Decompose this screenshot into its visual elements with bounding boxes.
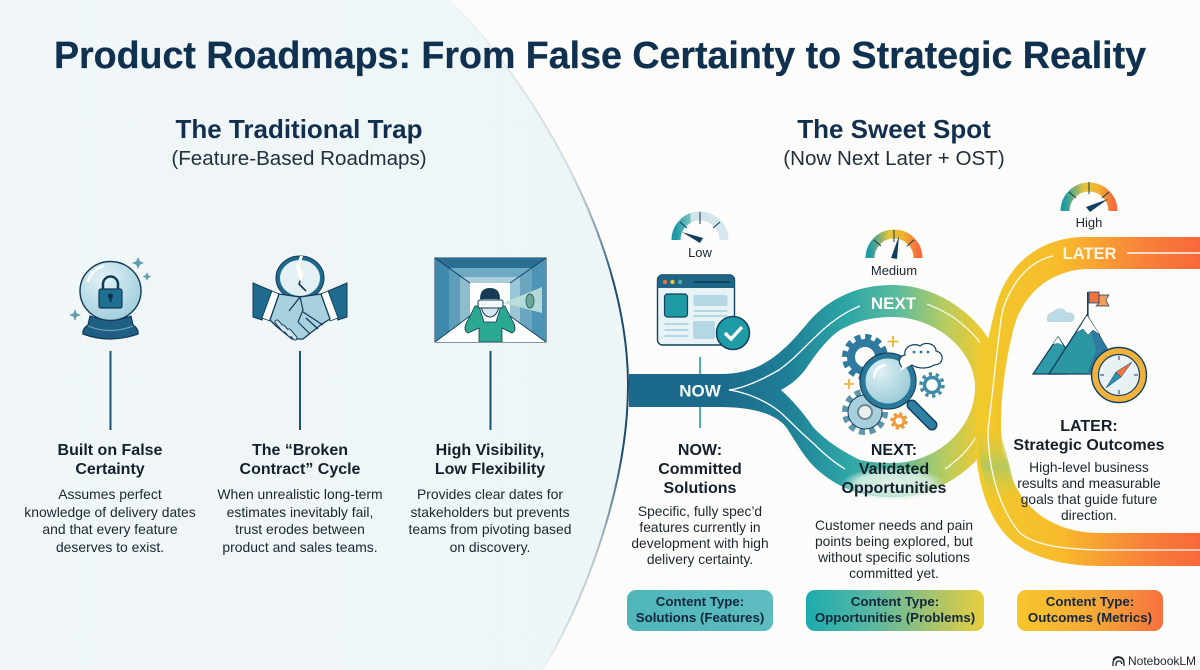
text block: next validated opportunities: Customer needs and pain [815, 518, 973, 533]
text block: now committed solutions: NOW: [678, 442, 722, 459]
content type pill: solutions: Solutions (Features) [636, 610, 764, 625]
text block: broken contract cycle: estimates inevitably fail, [227, 504, 373, 520]
ribbon label: NOW: NOW [679, 382, 722, 400]
text block: high visibility low flexibility: stakeholders but prevents [410, 504, 570, 520]
icon: person in VR headset inside tunnel [435, 258, 546, 342]
text block: now committed solutions: Specific, fully spec’d [638, 504, 762, 519]
ribbon: LATER path [975, 237, 1200, 566]
heading: the traditional trap [171, 114, 427, 170]
heading: the sweet spot: (Now Next Later + OST) [783, 147, 1005, 170]
text block: next validated opportunities: without specific solutions [818, 550, 970, 565]
gauge: high: High [1076, 215, 1102, 230]
connector line [299, 351, 301, 430]
heading: the traditional trap: The Traditional Trap [175, 114, 423, 144]
text block: broken contract cycle: Contract” Cycle [240, 461, 360, 478]
text block: broken contract cycle: product and sales teams. [222, 538, 378, 554]
text block: high visibility low flexibility: Low Flexibility [435, 461, 545, 478]
content type pill: opportunities: Content Type: [851, 594, 939, 609]
text block: next validated opportunities: Opportunities [842, 480, 946, 497]
arc divider between panels [450, 0, 628, 670]
text block: now committed solutions: Committed [658, 461, 742, 478]
content type pill: opportunities [806, 590, 984, 631]
connector line [490, 351, 492, 430]
gauge: medium [870, 230, 918, 278]
text block: now committed solutions: development with high [631, 536, 769, 551]
text block: built on false certainty: Built on False [58, 442, 162, 459]
ribbon: NEXT loop [720, 285, 1005, 501]
heading: the sweet spot: The Sweet Spot [797, 114, 991, 144]
left panel background: traditional trap [0, 0, 628, 670]
text block: next validated opportunities: NEXT: [871, 442, 917, 459]
content type pill: outcomes: Outcomes (Metrics) [1028, 610, 1152, 625]
content type pill: outcomes [1017, 590, 1163, 631]
text block: now committed solutions: features currently in [639, 520, 761, 535]
text block: now committed solutions: delivery certainty. [647, 552, 753, 567]
ribbon label: NEXT: NEXT [871, 294, 917, 313]
text block: broken contract cycle [217, 442, 383, 555]
text block: built on false certainty: and that every feature [42, 521, 178, 537]
text block: high visibility low flexibility: on discovery. [450, 538, 530, 554]
content type pill: solutions: Content Type: [656, 594, 744, 609]
icon: broken clock and handshake [253, 256, 347, 339]
gauge: low: Low [688, 245, 713, 260]
gauge: medium: Medium [871, 263, 917, 278]
text block: broken contract cycle: The “Broken [252, 442, 348, 459]
footer: NotebookLM wordmark: NotebookLM [1128, 654, 1196, 668]
text block: high visibility low flexibility: teams from pivoting based [409, 521, 571, 537]
icon: gears, magnifier and speech bubble [844, 336, 943, 432]
ribbon: NOW band [629, 374, 722, 407]
text block: built on false certainty: Certainty [75, 461, 145, 478]
connector line [110, 351, 112, 430]
text block: later strategic outcomes: LATER: [1060, 418, 1118, 435]
heading: the traditional trap: (Feature-Based Roadmaps) [171, 147, 427, 170]
icon: mountain, flag and compass [1033, 292, 1146, 402]
text block: built on false certainty: deserves to exist. [56, 538, 164, 554]
title: Product Roadmaps: From False Certainty to Strategic Reality [54, 34, 1146, 76]
text block: later strategic outcomes: direction. [1061, 508, 1117, 523]
text block: later strategic outcomes [1013, 418, 1165, 523]
text block: now committed solutions: Solutions [664, 480, 736, 497]
text block: high visibility low flexibility: High Visibility, [436, 442, 544, 459]
icon: browser window with check [658, 275, 750, 350]
content type pill: solutions [627, 590, 773, 631]
text block: next validated opportunities [815, 442, 973, 581]
text block: later strategic outcomes: goals that guide future [1021, 492, 1157, 507]
heading: the sweet spot [783, 114, 1005, 170]
text block: later strategic outcomes: High-level business [1029, 460, 1149, 475]
gauge: high [1065, 182, 1113, 230]
text block: high visibility low flexibility: Provides clear dates for [417, 486, 563, 502]
text block: built on false certainty: knowledge of delivery dates [24, 504, 196, 520]
text block: built on false certainty: Assumes perfect [58, 486, 162, 502]
text block: built on false certainty [24, 442, 196, 554]
text block: next validated opportunities: Validated [859, 461, 929, 478]
ribbon label: LATER: LATER [1063, 245, 1116, 263]
icon: crystal ball with lock [69, 257, 152, 339]
text block: next validated opportunities: points being explored, but [815, 534, 973, 549]
gauge: low [676, 212, 724, 260]
text block: later strategic outcomes: results and measurable [1017, 476, 1161, 491]
text block: later strategic outcomes: Strategic Outcomes [1013, 437, 1165, 454]
icon: NotebookLM mark [1113, 657, 1124, 666]
text block: now committed solutions [631, 442, 769, 567]
content type pill: outcomes: Content Type: [1046, 594, 1134, 609]
content type pill: opportunities: Opportunities (Problems) [815, 610, 975, 625]
text block: next validated opportunities: committed yet. [849, 566, 939, 581]
connector lines for NOW [699, 357, 701, 428]
text block: high visibility low flexibility [408, 442, 571, 555]
text block: broken contract cycle: trust erodes between [235, 521, 365, 537]
text block: broken contract cycle: When unrealistic long-term [217, 486, 383, 502]
